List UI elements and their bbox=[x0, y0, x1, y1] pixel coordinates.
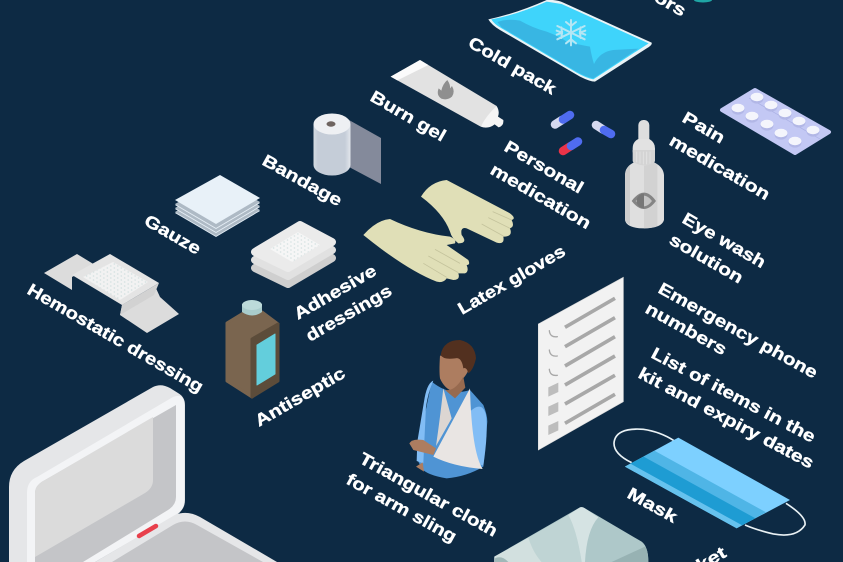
label: emergency phone numbers bbox=[642, 279, 821, 382]
kit latch bbox=[139, 526, 156, 536]
label: eye wash solution: Eye wash bbox=[679, 209, 769, 272]
kit lid bbox=[9, 385, 185, 562]
label: personal medication: medication bbox=[487, 160, 594, 233]
label: cold pack: Cold pack bbox=[465, 33, 560, 99]
icon: scissors handle bbox=[694, 0, 712, 2]
label: list of items and expiry dates: List of items in the bbox=[648, 344, 819, 446]
label: bandage: Bandage bbox=[259, 151, 345, 210]
label: emergency phone numbers: numbers bbox=[642, 299, 730, 359]
icon: flame bbox=[438, 80, 454, 99]
icon: calendars bbox=[548, 383, 558, 435]
label: list of items and expiry dates bbox=[635, 344, 819, 473]
label: adhesive dressings: Adhesive bbox=[290, 261, 380, 323]
icon: checklist paper bbox=[538, 277, 623, 450]
label: latex gloves: Latex gloves bbox=[454, 242, 569, 318]
label: pain medication bbox=[666, 108, 773, 204]
label: triangular cloth for arm sling: for arm sling bbox=[343, 470, 460, 546]
label: pain medication: medication bbox=[666, 131, 773, 204]
icon: person with arm sling bbox=[409, 340, 487, 478]
icon: bandage roll bbox=[314, 114, 381, 184]
label: list of items and expiry dates: kit and expiry dates bbox=[635, 364, 817, 473]
label: burn gel: Burn gel bbox=[367, 87, 449, 145]
label: triangular cloth for arm sling: Triangular cloth bbox=[356, 449, 501, 541]
icon: eye wash bottle bbox=[625, 120, 664, 228]
label: personal medication: Personal bbox=[501, 137, 587, 197]
icon: surgical mask bbox=[614, 429, 805, 535]
icon: gauze stack bbox=[175, 175, 260, 237]
icon: hemostatic dressing bbox=[44, 254, 179, 333]
label: mask: Mask bbox=[624, 484, 681, 527]
label: triangular cloth for arm sling bbox=[343, 449, 501, 546]
pill: red and blue bbox=[563, 142, 578, 151]
label: eye wash solution bbox=[666, 209, 769, 287]
icon: phone marks bbox=[549, 331, 557, 375]
icon: snowflake bbox=[557, 20, 585, 45]
pill: white and blue bbox=[555, 115, 570, 124]
icon: blister pack bbox=[722, 90, 829, 153]
icon: adhesive dressings bbox=[255, 225, 332, 284]
label: hemostatic dressing: Hemostatic dressing bbox=[24, 280, 207, 396]
kit base bbox=[95, 513, 277, 562]
label: adhesive dressings: dressings bbox=[302, 281, 395, 345]
icon: folded blanket bbox=[494, 507, 648, 562]
label: personal medication bbox=[487, 137, 594, 233]
label: antiseptic: Antiseptic bbox=[252, 364, 348, 430]
label: gauze: Gauze bbox=[141, 211, 204, 258]
icon: pills bbox=[555, 115, 611, 151]
pill: white and blue right bbox=[596, 125, 611, 134]
label: eye wash solution: solution bbox=[666, 230, 747, 287]
icon: cold pack bbox=[488, 0, 652, 82]
panel: first aid kit box bbox=[9, 385, 277, 562]
label: emergency phone numbers: Emergency phone bbox=[655, 279, 821, 382]
icon: antiseptic bottle bbox=[227, 300, 278, 397]
label: pain medication: Pain bbox=[679, 108, 728, 147]
icon: burn gel tube bbox=[391, 60, 503, 128]
icon: latex gloves bbox=[363, 180, 514, 282]
label: adhesive dressings bbox=[290, 261, 395, 345]
icon: eye bbox=[632, 193, 656, 209]
